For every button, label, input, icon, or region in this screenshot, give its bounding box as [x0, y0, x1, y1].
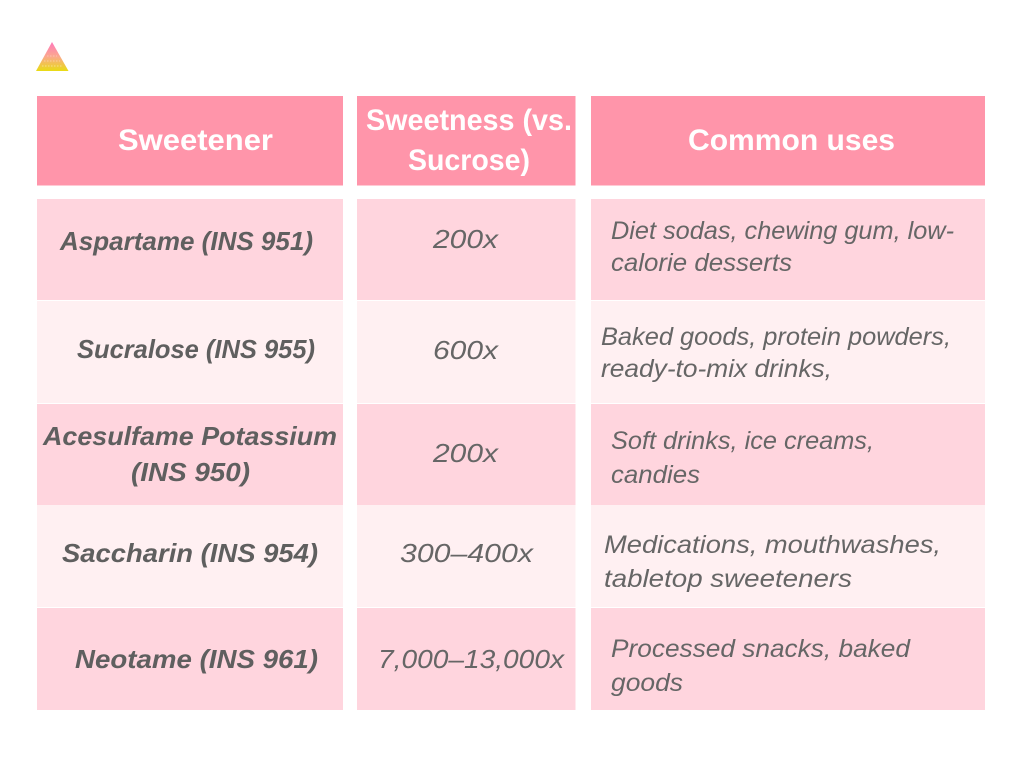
- row: Sucralose: 600x: [433, 335, 499, 365]
- row: Neotame: Processed snacks, baked: [611, 635, 911, 663]
- row: Acesulfame Potassium: 200x: [432, 438, 499, 468]
- row: Acesulfame Potassium: Acesulfame Potassium: [42, 421, 337, 451]
- row: Saccharin: tabletop sweeteners: [604, 565, 852, 593]
- row: Sucralose: ready-to-mix drinks,: [601, 355, 832, 383]
- header: Sweetness vs. Sucrose: Sucrose): [408, 144, 530, 177]
- row: Sucralose: Baked goods, protein powders,: [601, 323, 951, 351]
- row: Saccharin: 300–400x: [400, 538, 534, 568]
- row: Acesulfame Potassium: candies: [611, 461, 700, 489]
- header: Sweetness vs. Sucrose: [357, 96, 576, 186]
- header: Sweetener: [37, 96, 343, 186]
- table: [37, 96, 985, 710]
- row: Aspartame: [37, 199, 985, 300]
- row: Neotame: Neotame (INS 961): [75, 644, 318, 674]
- row: Acesulfame Potassium: (INS 950): [131, 457, 250, 487]
- row: Neotame: goods: [611, 669, 683, 697]
- row: Sucralose: Sucralose (INS 955): [77, 334, 315, 364]
- row: Aspartame: calorie desserts: [611, 249, 792, 277]
- header: Sweetness vs. Sucrose: Sweetness (vs.: [366, 104, 572, 137]
- header: Common uses: Common uses: [688, 124, 895, 157]
- row: Saccharin: Medications, mouthwashes,: [604, 531, 941, 559]
- row: Acesulfame Potassium: Soft drinks, ice creams,: [611, 427, 874, 455]
- row: Neotame: [37, 608, 985, 710]
- row: Saccharin: [37, 505, 985, 607]
- row: Aspartame: Diet sodas, chewing gum, low-: [611, 217, 954, 245]
- row: Sucralose: [37, 301, 985, 403]
- row: Aspartame: 200x: [432, 224, 499, 254]
- header: Common uses: [591, 96, 985, 186]
- row: Aspartame: Aspartame (INS 951): [59, 226, 313, 256]
- icon: pyramid logo: [36, 42, 68, 71]
- row: Neotame: 7,000–13,000x: [378, 644, 565, 674]
- row: Acesulfame Potassium: [37, 404, 985, 505]
- header row: [37, 96, 985, 186]
- header: Sweetener: Sweetener: [118, 124, 273, 157]
- row: Saccharin: Saccharin (INS 954): [62, 538, 318, 568]
